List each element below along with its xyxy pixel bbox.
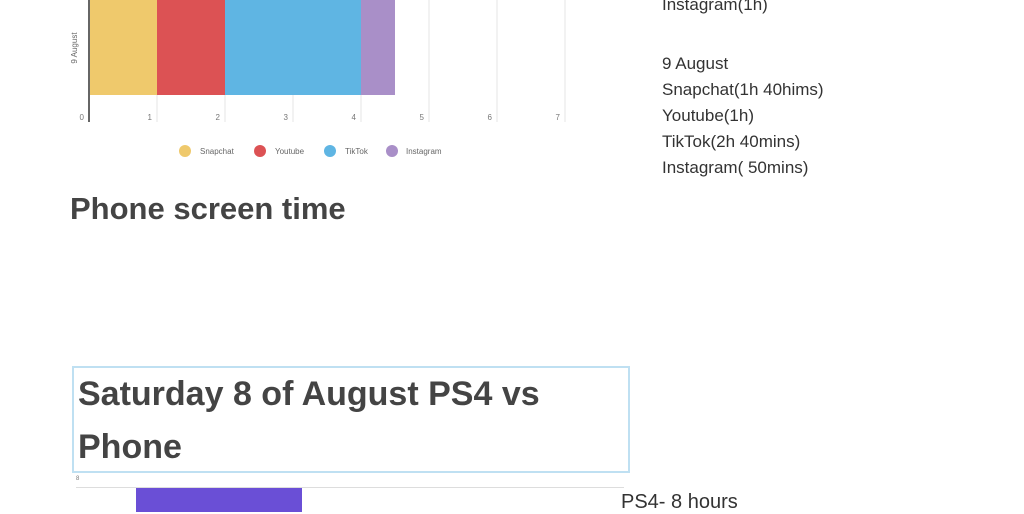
bar chart: phone screen time (70, 0, 566, 157)
bar chart: phone screen time: 2 (216, 113, 221, 122)
bar chart: PS4 vs phone (76, 476, 624, 512)
heading box: Saturday 8 of August PS4 vs Phone: Phone (78, 428, 182, 466)
heading: phone screen time: Phone screen time (70, 191, 346, 226)
bar chart: phone screen time: 1 (148, 113, 153, 122)
bar chart: phone screen time: 9 August (70, 32, 79, 64)
bar chart: phone screen time: TikTok (345, 147, 369, 156)
bar chart: phone screen time: 0 (80, 113, 85, 122)
bar chart: PS4 vs phone: 8 (76, 476, 79, 482)
bar chart: phone screen time: 4 (352, 113, 357, 122)
bar chart: phone screen time: 7 (556, 113, 561, 122)
text block: 9 August app times: TikTok(2h 40mins) (662, 132, 800, 151)
bar chart: phone screen time: Snapchat (200, 147, 235, 156)
text block: 9 August app times (662, 54, 824, 177)
bar chart: phone screen time: 3 (284, 113, 289, 122)
bar chart: phone screen time: Instagram (406, 147, 442, 156)
heading box: Saturday 8 of August PS4 vs Phone: Saturday 8 of August PS4 vs (78, 375, 540, 413)
bar chart: phone screen time: 6 (488, 113, 493, 122)
heading box: Saturday 8 of August PS4 vs Phone (72, 366, 630, 473)
bar chart: phone screen time: 5 (420, 113, 425, 122)
text block: 9 August app times: 9 August (662, 54, 728, 73)
text block: 9 August app times: Instagram( 50mins) (662, 158, 808, 177)
text block: 9 August app times: Youtube(1h) (662, 106, 754, 125)
bar chart: phone screen time: Youtube (275, 147, 305, 156)
text block: 9 August app times: Snapchat(1h 40hims) (662, 80, 824, 99)
label: PS4 hours: PS4- 8 hours (621, 491, 738, 513)
